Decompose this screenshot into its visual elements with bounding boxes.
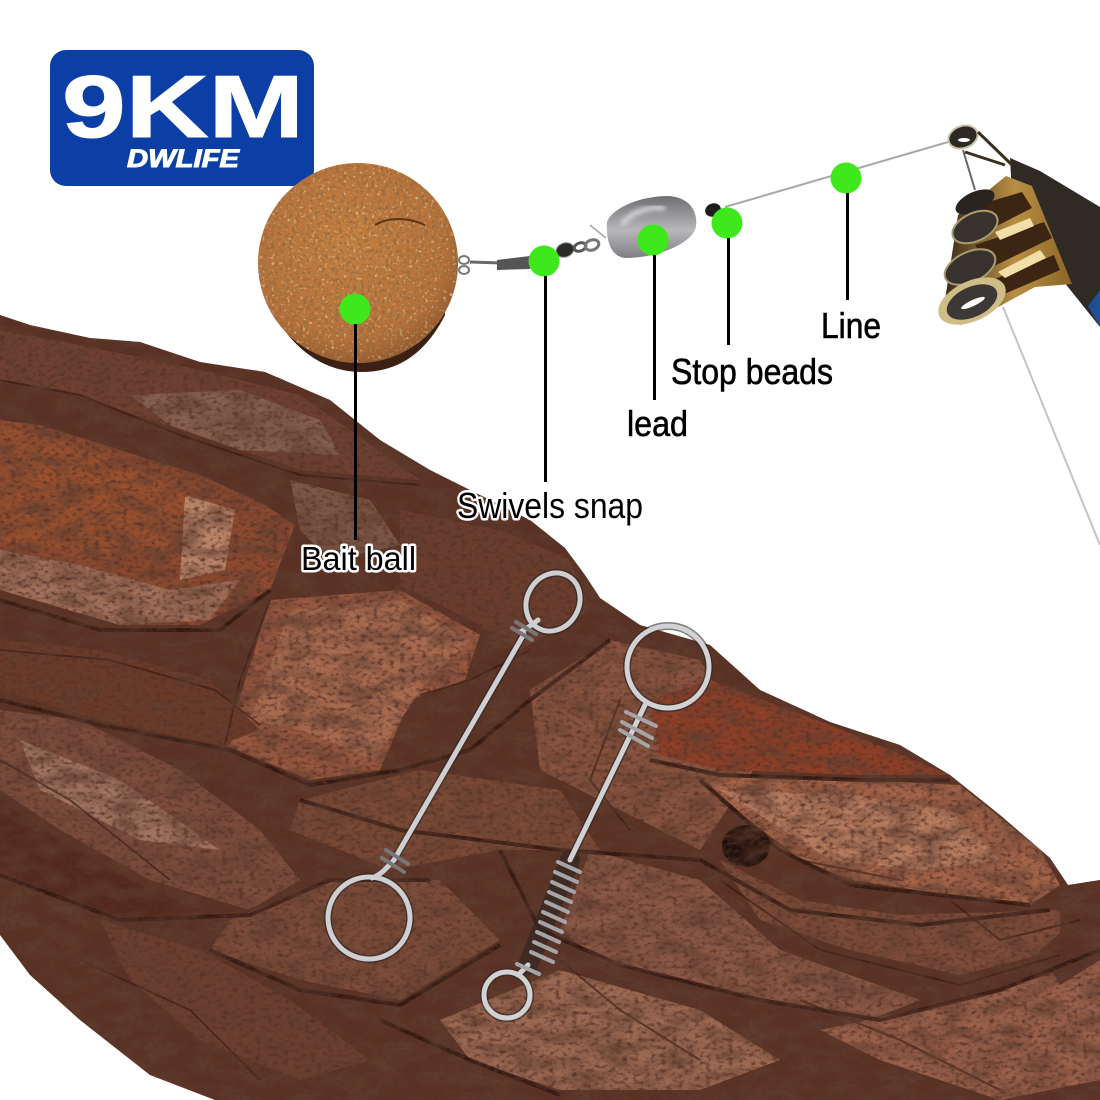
logo: 9KM DWLIFE xyxy=(50,50,314,186)
leader line xyxy=(846,193,849,300)
fishing line xyxy=(725,140,1100,545)
logo subtitle: DWLIFE xyxy=(127,145,241,173)
bark texture xyxy=(0,315,1100,1100)
bait ball xyxy=(258,163,458,372)
label: swivels snap xyxy=(457,246,643,526)
ball shadow xyxy=(272,280,445,372)
logo wordmark: 9KM xyxy=(62,57,304,156)
marker dot xyxy=(712,208,742,238)
stop bead xyxy=(703,201,723,219)
dark crevices xyxy=(0,590,1100,1095)
bark base shape xyxy=(0,315,1100,1100)
label: stop beads xyxy=(671,208,833,392)
leader line xyxy=(354,324,357,540)
label: lead xyxy=(627,224,688,444)
label text: Bait ball xyxy=(301,540,416,577)
fine bark cracks xyxy=(0,380,1080,1090)
ball body xyxy=(258,163,458,363)
product: long-spring swivel snap, right xyxy=(484,626,709,1018)
label: line xyxy=(821,162,881,346)
leader line xyxy=(727,238,730,345)
gold guide frames xyxy=(945,176,1072,325)
cork light speckle xyxy=(258,163,458,363)
leader line xyxy=(544,276,547,482)
label text: Stop beads xyxy=(671,351,833,392)
lead sinker xyxy=(607,196,696,258)
top guide xyxy=(945,122,981,152)
marker dot xyxy=(528,246,560,276)
label text: Swivels snap xyxy=(457,485,643,526)
bark photo xyxy=(0,315,1100,1100)
leader line xyxy=(653,255,656,400)
fine bark texture xyxy=(0,315,1100,1100)
product: long-loop swivel snap, left xyxy=(328,563,591,959)
logo badge xyxy=(50,50,314,186)
label text: lead xyxy=(627,403,688,444)
guide rings xyxy=(952,184,998,220)
rod tip with guides xyxy=(931,122,1100,334)
swivel snap rig xyxy=(459,225,606,274)
rod blank xyxy=(1010,158,1100,327)
marker dot xyxy=(340,294,370,324)
marker dot xyxy=(830,162,862,194)
cork dark speckle xyxy=(258,163,458,363)
label text: Line xyxy=(821,305,881,346)
marker dot xyxy=(638,224,668,256)
label: bait ball xyxy=(301,294,416,577)
